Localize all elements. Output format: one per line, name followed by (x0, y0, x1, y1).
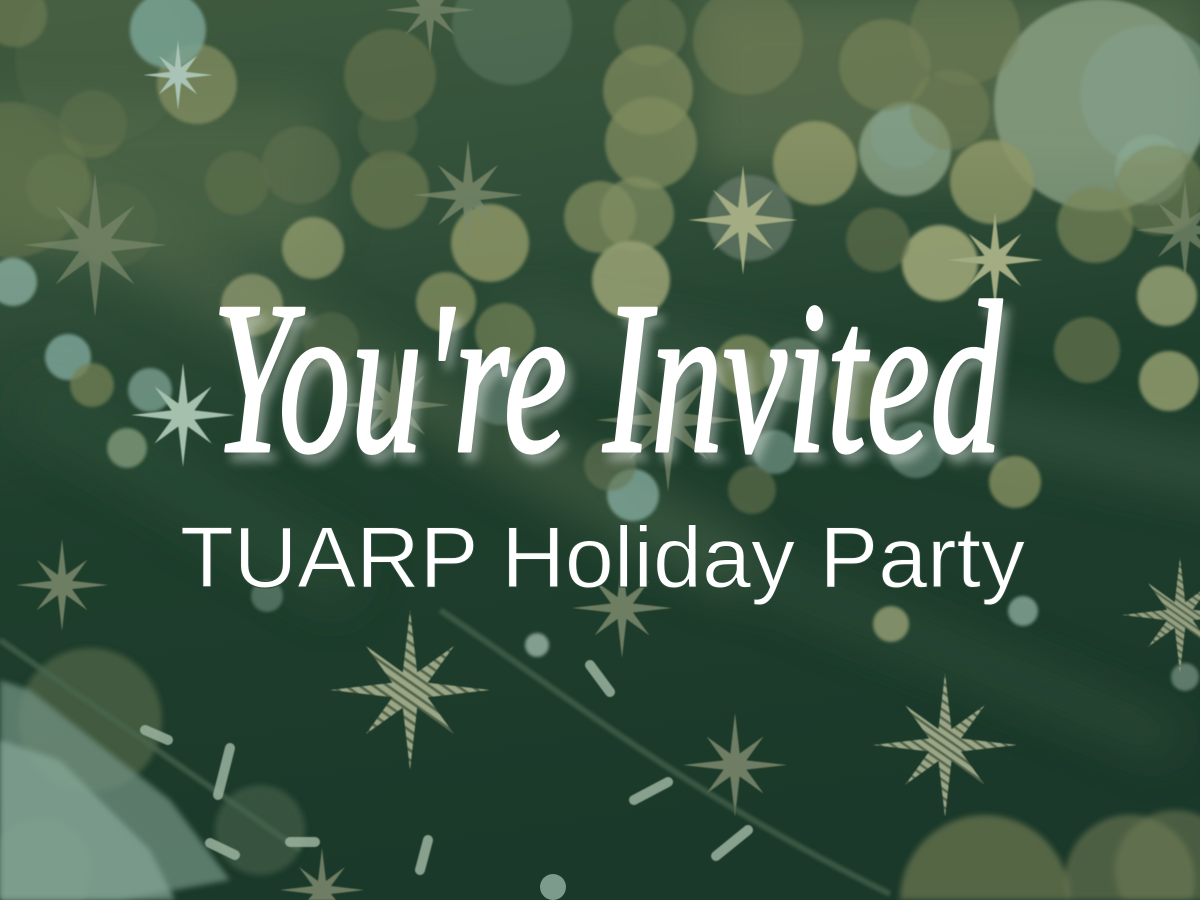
subtitle: TUARP Holiday Party: TUARP Holiday Party (180, 510, 1025, 606)
bokeh lights (0, 0, 1200, 691)
string lights wire and bulbs (0, 610, 890, 900)
soft lower corner lights (18, 648, 1200, 900)
